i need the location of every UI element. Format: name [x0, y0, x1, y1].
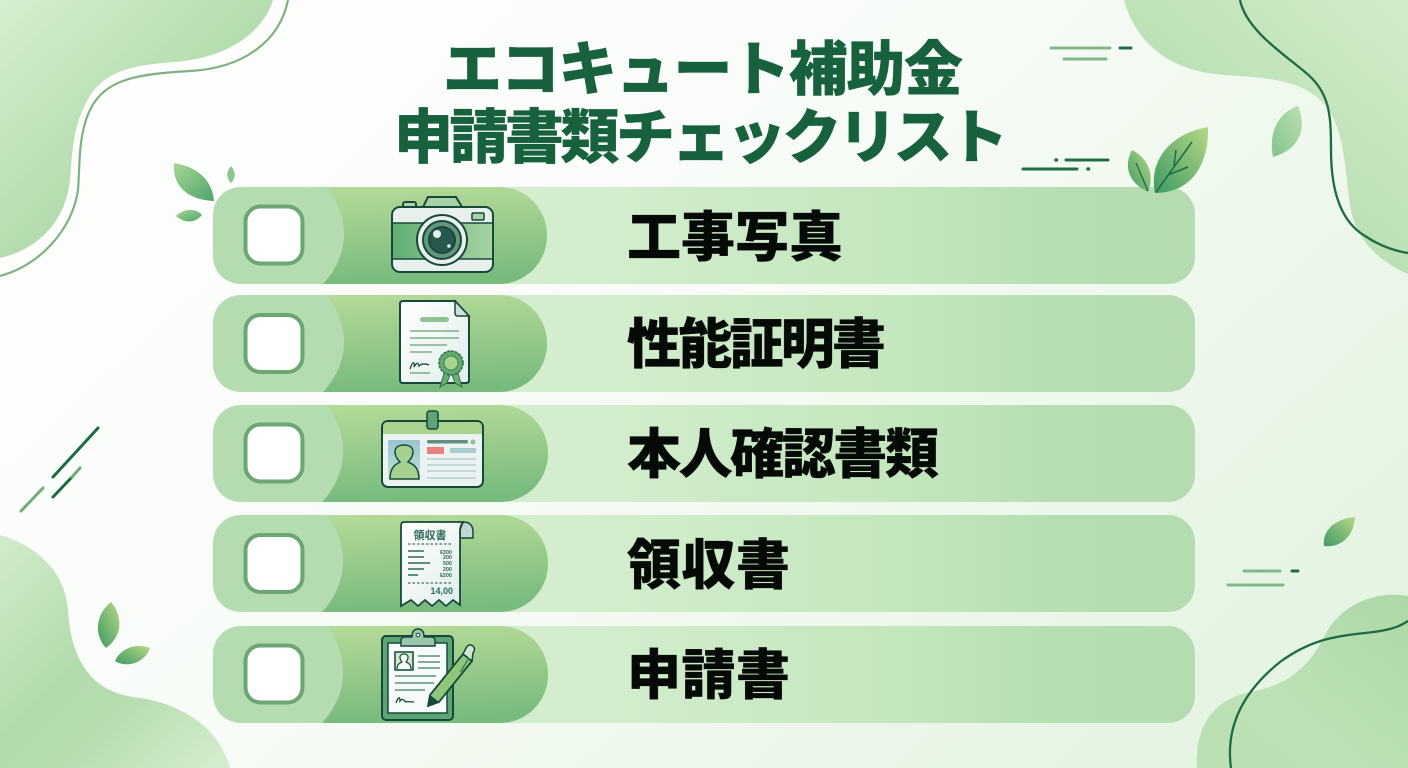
checkbox: [246, 206, 302, 264]
checklist row: 本人確認書類: [213, 405, 1195, 502]
icon: receipt: [401, 522, 473, 606]
checklist row: 性能証明書: [213, 295, 1195, 392]
icon: receipt: ¥300: [440, 550, 452, 556]
decoration: bottom-left blob: [0, 535, 230, 768]
label: 申請書: [627, 646, 790, 706]
checklist row: 領収書: [213, 515, 1195, 612]
icon: receipt: 200: [443, 567, 452, 573]
leaf cluster: bottom left: [98, 602, 150, 664]
icon: receipt: ¥200: [440, 573, 452, 579]
icon: receipt: 200: [443, 555, 452, 561]
label: 性能証明書: [627, 315, 886, 375]
checkbox: [246, 315, 302, 372]
label: 領収書: [627, 536, 790, 596]
leaf cluster: top right: [1128, 127, 1208, 193]
icon: certificate: [400, 301, 469, 387]
title: [394, 37, 1008, 171]
checklist row: 申請書: [213, 626, 1195, 723]
label: 本人確認書類: [627, 425, 939, 485]
checkbox: [246, 535, 302, 592]
leaf cluster: row one left: [174, 163, 235, 222]
decoration: top-left blob: [0, 0, 288, 276]
leaf: floating top right: [1272, 106, 1302, 157]
icon: ID card: [382, 411, 483, 487]
decoration: speed lines: [21, 48, 1298, 585]
checkbox: [246, 424, 302, 482]
checkbox: [246, 646, 302, 702]
icon: receipt: 500: [443, 561, 452, 567]
icon: camera: [392, 197, 493, 272]
checklist row: 工事写真: [213, 187, 1195, 284]
label: 工事写真: [627, 208, 843, 268]
decoration: top-right blob: [1124, 0, 1408, 274]
icon: receipt: 14,00: [430, 586, 453, 596]
decoration: bottom-right blob: [1197, 595, 1408, 768]
title: 申請書類チェックリスト: [394, 105, 1008, 171]
leaf: bottom right: [1324, 517, 1355, 546]
icon: clipboard and pen: [382, 629, 474, 720]
title: エコキュート補助金: [443, 37, 963, 103]
icon: receipt: 領収書: [414, 528, 446, 542]
